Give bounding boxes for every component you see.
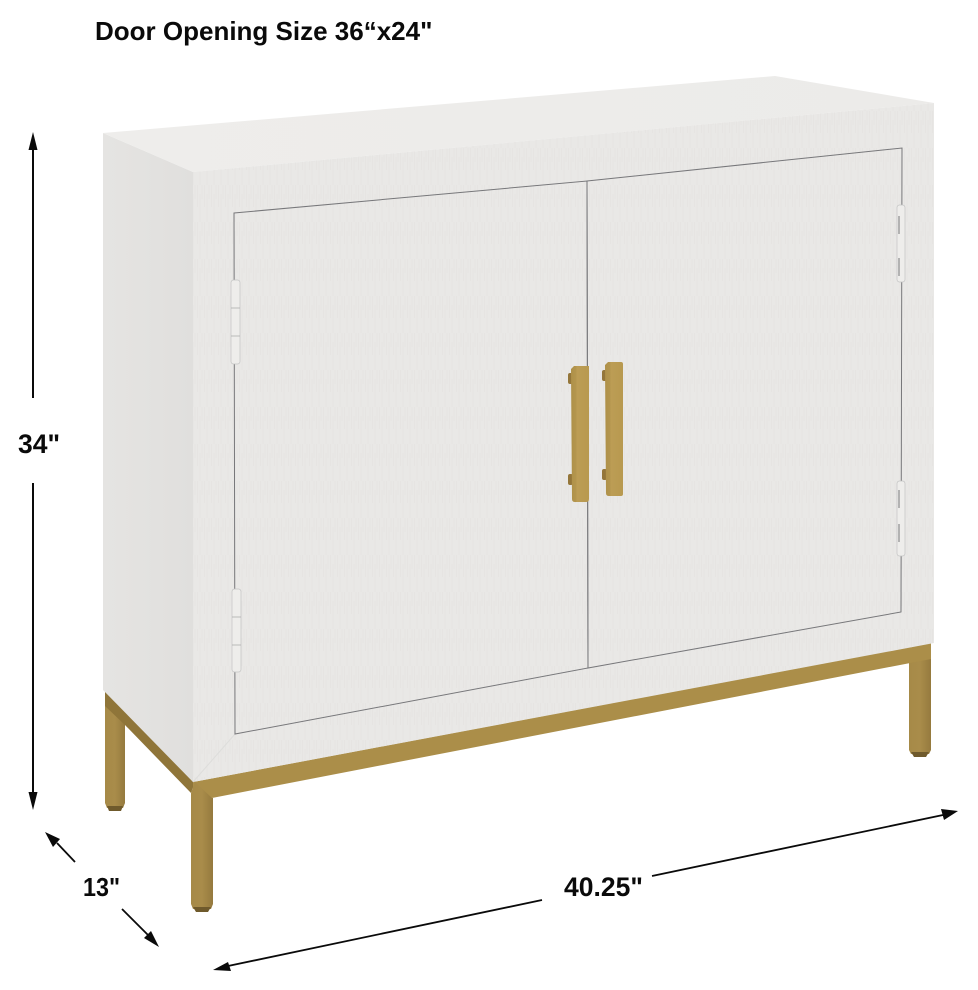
right door handle xyxy=(602,362,623,496)
top panel xyxy=(103,76,934,172)
depth arrow xyxy=(45,832,159,947)
width arrow xyxy=(213,809,958,971)
hinge: lower right xyxy=(897,481,905,556)
back left leg xyxy=(105,700,125,811)
right door xyxy=(587,148,902,668)
metal base frame xyxy=(105,643,931,912)
frame mitre lines xyxy=(193,734,235,782)
front left leg xyxy=(191,782,213,912)
front rail xyxy=(193,643,931,798)
side rail xyxy=(105,690,195,793)
hinge: upper left xyxy=(231,280,240,364)
left door xyxy=(234,181,588,734)
hinge: lower left xyxy=(232,589,241,672)
front panel xyxy=(193,103,934,782)
height label: 34" xyxy=(18,429,60,459)
right leg xyxy=(909,650,931,757)
title: Door Opening Size 36“x24" xyxy=(95,16,432,46)
left door handle xyxy=(568,366,589,502)
depth label: 13" xyxy=(83,872,120,902)
height arrow xyxy=(28,132,38,810)
width label: 40.25" xyxy=(564,872,643,902)
hinge: upper right xyxy=(897,205,905,282)
wood grain xyxy=(193,103,934,782)
side panel xyxy=(103,133,193,782)
cabinet xyxy=(103,76,934,912)
